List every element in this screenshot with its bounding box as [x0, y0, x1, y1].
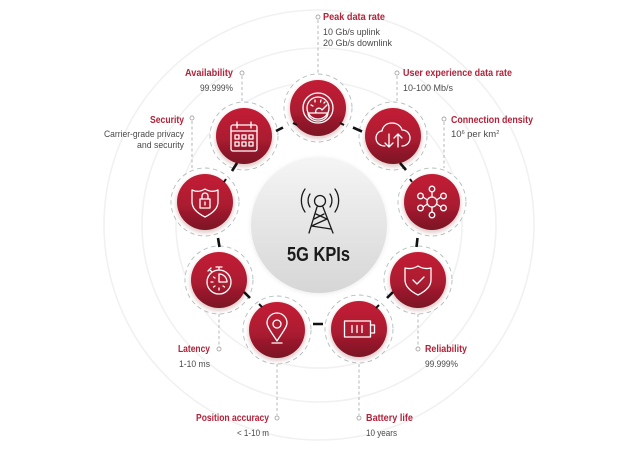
- heading: 5G KPIs: 5G KPIs: [287, 244, 350, 266]
- label: latency: Latency: [178, 343, 210, 355]
- label: reliability: 99.999%: [425, 359, 458, 370]
- label: battery life: Battery life: [366, 412, 413, 424]
- icon: network hub: [418, 186, 446, 218]
- leader lines: [190, 15, 446, 420]
- label: connection density: 6: [462, 130, 465, 136]
- label: connection density: per km: [467, 129, 496, 140]
- label: peak data rate: Peak data rate: [323, 11, 385, 23]
- icon: speedometer: [303, 93, 333, 123]
- label: connection density: 2: [496, 130, 499, 136]
- label: connection density: Connection density: [451, 114, 533, 126]
- icon: cloud with arrows: [376, 123, 410, 147]
- label: availability: 99.999%: [200, 83, 233, 94]
- icon: battery: [344, 321, 374, 337]
- label: position accuracy: < 1-10 m: [237, 428, 269, 439]
- label: security: Security: [150, 114, 184, 126]
- label: battery life: [366, 412, 413, 439]
- label: reliability: [425, 343, 467, 370]
- node: security: [171, 168, 239, 236]
- node: latency: [185, 246, 253, 314]
- label: availability: [185, 67, 233, 94]
- label: peak data rate: 20 Gb/s downlink: [323, 38, 392, 49]
- label: connection density: 10: [451, 129, 462, 140]
- label: security: [104, 114, 184, 151]
- label: user experience data rate: [403, 67, 512, 94]
- label: connection density: [451, 114, 533, 140]
- icon: stopwatch: [207, 267, 231, 294]
- label: peak data rate: [323, 11, 392, 49]
- label: reliability: Reliability: [425, 343, 467, 355]
- icon: map pin: [267, 313, 287, 343]
- label: security: and security: [137, 140, 184, 151]
- label: user experience data rate: User experience data rate: [403, 67, 512, 79]
- label: user experience data rate: 10-100 Mb/s: [403, 83, 453, 94]
- label: peak data rate: 10 Gb/s uplink: [323, 27, 380, 38]
- node: user experience data rate: [359, 102, 427, 170]
- node: connection density: [398, 168, 466, 236]
- icon: calendar: [231, 122, 257, 151]
- label: latency: [178, 343, 210, 370]
- label: availability: Availability: [185, 67, 233, 79]
- label: battery life: 10 years: [366, 428, 397, 439]
- node: position accuracy: [243, 296, 311, 364]
- black connectors between nodes: [218, 123, 418, 324]
- background rings: [104, 10, 534, 440]
- icon: shield with lock: [192, 189, 218, 217]
- label: latency: 1-10 ms: [179, 359, 210, 370]
- label: position accuracy: Position accuracy: [196, 412, 269, 424]
- center circle: 5G KPIs: [251, 157, 387, 293]
- icon: antenna tower: [301, 189, 339, 233]
- node: availability: [210, 102, 278, 170]
- icon: shield with check: [405, 266, 431, 295]
- label: position accuracy: [196, 412, 269, 439]
- node: peak data rate: [284, 74, 352, 142]
- label: security: Carrier-grade privacy: [104, 129, 184, 140]
- node: reliability: [384, 246, 452, 314]
- node: battery life: [325, 295, 393, 363]
